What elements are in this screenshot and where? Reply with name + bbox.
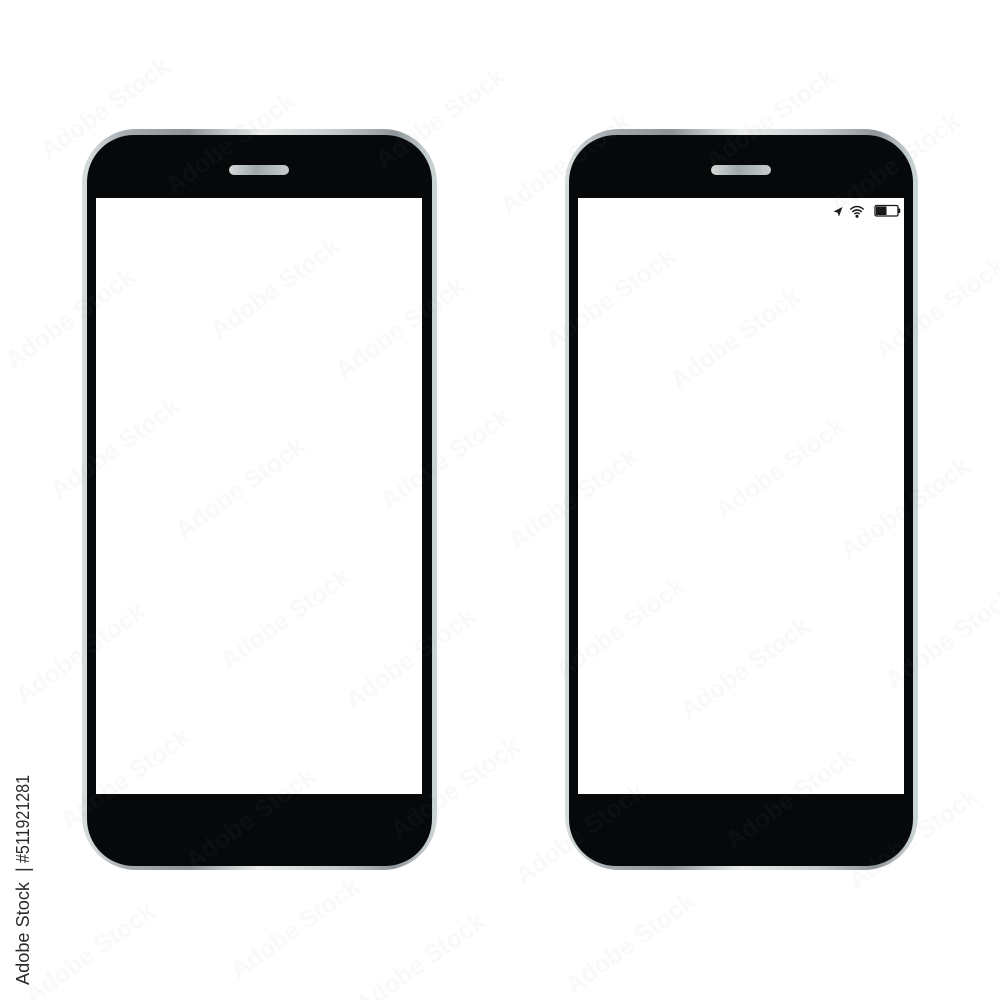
status icons	[834, 206, 900, 217]
watermark: faint repeated Adobe Stock marks: Adobe Stock	[835, 452, 975, 565]
watermark: faint repeated Adobe Stock marks: Adobe Stock	[720, 742, 860, 855]
watermark: faint repeated Adobe Stock marks: Adobe Stock	[160, 87, 300, 200]
watermark: faint repeated Adobe Stock marks: Adobe Stock	[170, 432, 310, 545]
watermark: faint repeated Adobe Stock marks: Adobe Stock	[675, 612, 815, 725]
watermark: faint repeated Adobe Stock marks: Adobe Stock	[35, 52, 175, 165]
watermark: faint repeated Adobe Stock marks: Adobe Stock	[510, 777, 650, 890]
phone: right with status icons	[565, 129, 918, 870]
vertical stock id text: Adobe Stock	[13, 881, 33, 985]
watermark: faint repeated Adobe Stock marks: Adobe Stock	[495, 107, 635, 220]
phone frame: silver edge	[82, 129, 437, 870]
watermark: faint repeated Adobe Stock marks: Adobe Stock	[340, 602, 480, 715]
watermark: faint repeated Adobe Stock marks: Adobe Stock	[710, 412, 850, 525]
watermark: faint repeated Adobe Stock marks: Adobe Stock	[215, 562, 355, 675]
watermark: faint repeated Adobe Stock marks: Adobe Stock	[10, 597, 150, 710]
watermark: faint repeated Adobe Stock marks: Adobe Stock	[825, 107, 965, 220]
icon: location arrow	[834, 207, 842, 216]
screen	[96, 198, 422, 794]
watermark: faint repeated Adobe Stock marks: Adobe Stock	[843, 782, 983, 895]
watermark: faint repeated Adobe Stock marks: Adobe Stock	[503, 442, 643, 555]
watermark: faint repeated Adobe Stock marks: Adobe Stock	[540, 242, 680, 355]
vertical stock id text	[13, 775, 33, 985]
vertical stock id text: |	[13, 867, 33, 872]
watermark: faint repeated Adobe Stock marks: Adobe Stock	[665, 282, 805, 395]
watermark: faint repeated Adobe Stock marks: Adobe Stock	[700, 62, 840, 175]
phone: left blank screen	[82, 129, 437, 870]
phone body: black	[569, 135, 913, 866]
screen	[578, 198, 904, 794]
phone frame: silver edge	[565, 129, 918, 870]
watermark: faint repeated Adobe Stock marks: Adobe Stock	[0, 262, 140, 375]
icon: battery	[875, 206, 900, 216]
watermark: faint repeated Adobe Stock marks: Adobe Stock	[45, 392, 185, 505]
watermark: faint repeated Adobe Stock marks: Adobe Stock	[205, 232, 345, 345]
watermark: faint repeated Adobe Stock marks: Adobe Stock	[375, 402, 515, 515]
watermark: faint repeated Adobe Stock marks: Adobe Stock	[225, 872, 365, 985]
speaker	[229, 165, 289, 175]
watermark: faint repeated Adobe Stock marks: Adobe Stock	[560, 887, 700, 1000]
watermark: faint repeated Adobe Stock marks: Adobe Stock	[55, 722, 195, 835]
speaker	[711, 165, 771, 175]
watermark: faint repeated Adobe Stock marks: Adobe Stock	[550, 572, 690, 685]
watermark: faint repeated Adobe Stock marks: Adobe Stock	[180, 762, 320, 875]
phone body: black	[87, 135, 432, 866]
vertical stock id text: #511921281	[13, 775, 33, 863]
watermark: faint repeated Adobe Stock marks: Adobe Stock	[385, 732, 525, 845]
watermark: faint repeated Adobe Stock marks: Adobe Stock	[330, 272, 470, 385]
watermark: faint repeated Adobe Stock marks: Adobe Stock	[370, 62, 510, 175]
icon: wifi	[850, 206, 864, 217]
